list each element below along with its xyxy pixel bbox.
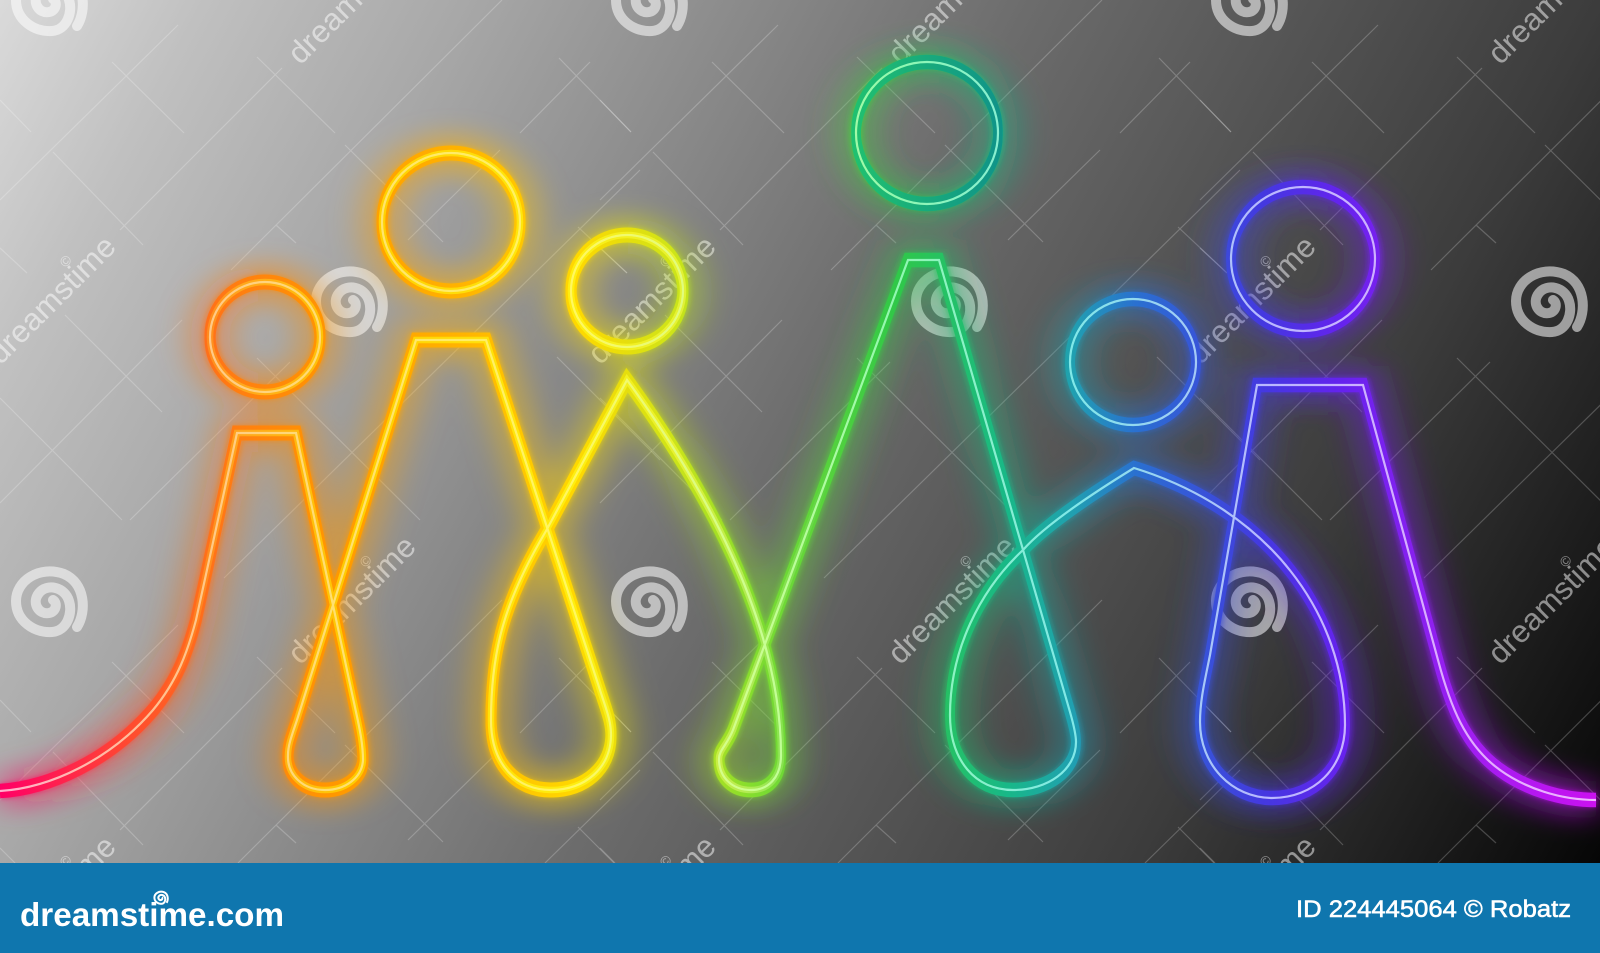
wide soft glow	[0, 62, 1596, 800]
footer logo dreamstime.com: dreamstime.com	[20, 896, 284, 933]
watermark spirals	[16, 0, 1583, 632]
footer bar	[0, 863, 1600, 953]
tight halo	[0, 62, 1596, 800]
coloured tube	[0, 60, 1596, 802]
neon family figures: rainbow outline people	[0, 60, 1596, 802]
warm inner tube highlight	[0, 62, 1596, 800]
footer image id and credit: ID 224445064 © Robatz	[1296, 896, 1571, 923]
thicker warm section of the tube	[0, 60, 1596, 802]
teal head of the tallest figure	[856, 60, 998, 206]
bright core line	[0, 62, 1596, 800]
